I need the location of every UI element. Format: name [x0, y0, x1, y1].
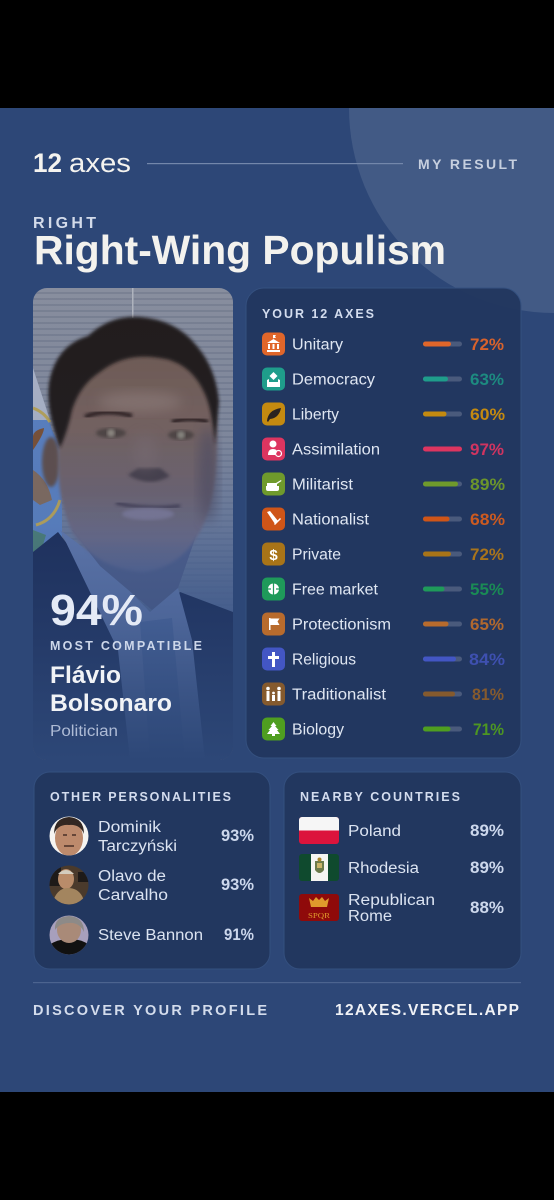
person: Steve Bannon: Steve Bannon — [98, 927, 203, 944]
axis: biology — [262, 718, 504, 740]
avatar — [49, 915, 89, 955]
category: RIGHT — [33, 215, 96, 232]
my result label: MY RESULT — [418, 156, 517, 172]
axis: protectionism: 65% — [470, 615, 504, 634]
axis: private: 72% — [470, 545, 504, 564]
title block — [33, 215, 446, 273]
axis: unitary: 72% — [470, 335, 504, 354]
cheek shadow right — [199, 427, 217, 523]
country: Poland — [299, 817, 504, 844]
axis: liberty: Liberty — [292, 406, 339, 424]
flag: Rhodesia — [299, 854, 339, 881]
flag: Rome — [299, 894, 339, 921]
footer url: 12AXES.VERCEL.APP — [335, 1002, 519, 1019]
person: Dominik Tarczyński: Dominik — [98, 819, 161, 836]
brows — [85, 412, 132, 417]
face — [58, 342, 217, 572]
panel: your 12 axes — [246, 288, 521, 758]
axis: protectionism — [262, 612, 504, 636]
ideology name: Right-Wing Populism — [34, 227, 446, 273]
person name: Bolsonaro — [50, 690, 172, 717]
country: Rhodesia: Rhodesia — [348, 860, 419, 877]
country: Republican Rome: 88% — [470, 899, 504, 917]
axis: religious — [262, 648, 505, 670]
axis: protectionism: Protectionism — [292, 616, 391, 634]
axis: militarist: Militarist — [292, 476, 354, 494]
mouth — [116, 503, 180, 507]
portrait photo — [33, 288, 233, 760]
person: Steve Bannon — [49, 915, 254, 955]
axis: biology: 71% — [473, 720, 504, 739]
axis: liberty: 60% — [470, 405, 505, 424]
header: logo and my result — [33, 148, 517, 178]
country: Republican Rome: Republican — [348, 892, 435, 909]
flag: Rome: SPQR — [308, 912, 330, 920]
axis: assimilation: 97% — [470, 440, 504, 459]
flag: Poland — [299, 817, 339, 844]
person name: Flávio — [50, 662, 121, 689]
country: Rhodesia — [299, 854, 504, 881]
logo: 12 — [33, 148, 62, 178]
axis: free market: 55% — [470, 580, 504, 599]
eyes — [96, 428, 126, 438]
person: Dominik Tarczyński — [49, 816, 254, 856]
panel: other personalities — [34, 772, 270, 969]
axis: biology: Biology — [292, 722, 344, 738]
compatibility score: 94% — [50, 586, 143, 635]
nose — [128, 468, 170, 482]
shirt — [60, 530, 202, 735]
axis: private — [262, 542, 504, 566]
country: Poland: 89% — [470, 822, 504, 840]
decorative corner circle — [349, 108, 554, 313]
person: Olavo de Carvalho: Carvalho — [98, 887, 168, 904]
axis: religious: Religious — [292, 652, 356, 668]
axis: traditionalist: 81% — [472, 685, 504, 704]
compatibility label: MOST COMPATIBLE — [50, 639, 202, 653]
country: Republican Rome — [299, 892, 504, 925]
hair — [48, 317, 219, 448]
axis: assimilation — [262, 438, 504, 460]
axis: unitary — [262, 332, 504, 356]
axis: traditionalist: Traditionalist — [292, 686, 387, 704]
logo: axes — [69, 148, 131, 178]
person: Dominik Tarczyński: 93% — [221, 827, 254, 845]
panel: nearby countries — [284, 772, 521, 969]
person role: Politician — [50, 723, 118, 740]
country: Republican Rome: Rome — [348, 908, 392, 925]
axis: democracy: 63% — [470, 370, 504, 389]
axis: militarist: 89% — [470, 475, 505, 494]
person: Olavo de Carvalho — [49, 865, 254, 905]
person: Dominik Tarczyński: Tarczyński — [98, 838, 177, 855]
panel: most compatible portrait — [33, 288, 233, 760]
heading: NEARBY COUNTRIES — [300, 790, 460, 804]
person name — [50, 662, 172, 717]
axis: free market — [262, 578, 504, 600]
footer — [33, 982, 521, 1019]
tie — [140, 618, 174, 648]
axis: democracy: Democracy — [292, 372, 375, 388]
axis: liberty — [262, 402, 505, 426]
heading: YOUR 12 AXES — [262, 307, 374, 321]
axis: private: $ — [269, 547, 278, 564]
axis: traditionalist — [262, 682, 504, 706]
avatar — [49, 816, 89, 856]
country: Rhodesia: 89% — [470, 859, 504, 877]
country: Poland: Poland — [348, 823, 401, 840]
axis: nationalist — [262, 508, 505, 530]
person: Olavo de Carvalho: 93% — [221, 876, 254, 894]
axis: private: Private — [292, 546, 341, 564]
ear — [42, 437, 60, 487]
forehead glow — [98, 392, 182, 412]
footer call to action: DISCOVER YOUR PROFILE — [33, 1003, 267, 1019]
axis: militarist — [262, 472, 505, 496]
heading: OTHER PERSONALITIES — [50, 790, 231, 804]
flag behind — [33, 368, 62, 560]
axis: unitary: Unitary — [292, 336, 343, 354]
axis: nationalist: Nationalist — [292, 512, 370, 528]
neck — [90, 541, 194, 608]
person: Steve Bannon: 91% — [224, 926, 254, 944]
axis: nationalist: 68% — [470, 510, 505, 529]
axis: religious: 84% — [469, 650, 505, 669]
axis: assimilation: Assimilation — [292, 442, 380, 458]
person: Olavo de Carvalho: Olavo de — [98, 868, 166, 885]
logo — [33, 148, 131, 178]
axis: democracy — [262, 368, 504, 390]
avatar — [49, 865, 89, 905]
axis: free market: Free market — [292, 582, 379, 598]
suit — [33, 532, 233, 760]
